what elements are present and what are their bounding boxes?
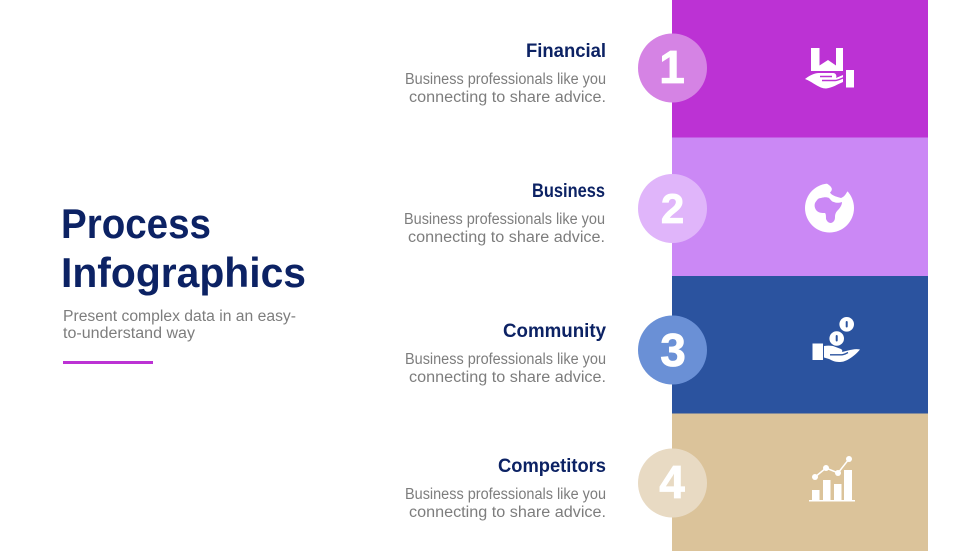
accent underline bbox=[63, 361, 153, 364]
panel: step 1 band bbox=[672, 0, 928, 138]
number badge 3 bbox=[638, 316, 707, 384]
step 1 text: Financial: connecting to share advice. bbox=[409, 89, 606, 106]
subtitle: to-understand way bbox=[63, 325, 195, 342]
icon: hand holding book bbox=[805, 48, 854, 88]
step 4 text: Competitors: Competitors bbox=[498, 456, 606, 477]
step 1 text: Financial: Financial bbox=[526, 41, 606, 62]
number badge 3: 3 bbox=[660, 324, 686, 376]
step 4 text: Competitors bbox=[405, 456, 606, 521]
subtitle: Present complex data in an easy- bbox=[63, 308, 296, 325]
panel: step 2 band bbox=[672, 138, 928, 276]
number badge 4: 4 bbox=[659, 456, 685, 508]
number badge 2 bbox=[638, 174, 707, 243]
number badge 4 bbox=[638, 448, 707, 518]
icon: globe bbox=[805, 176, 858, 232]
icon: hand receiving coins bbox=[812, 317, 860, 362]
step 3 text: Community bbox=[405, 321, 606, 386]
number badge 1 bbox=[638, 34, 707, 102]
title: Process bbox=[61, 200, 211, 247]
number badge 2: 2 bbox=[661, 185, 684, 232]
step 1 text: Financial: Business professionals like you bbox=[405, 71, 606, 88]
number badge 1: 1 bbox=[659, 41, 685, 93]
step 2 text: Business: Business bbox=[532, 181, 605, 202]
step 2 text: Business: Business professionals like you bbox=[404, 211, 605, 228]
step 2 text: Business: connecting to share advice. bbox=[408, 229, 605, 246]
step 2 text: Business bbox=[404, 181, 605, 246]
title bbox=[61, 200, 306, 296]
step 4 text: Competitors: connecting to share advice. bbox=[409, 504, 606, 521]
icon: bar chart with trend line bbox=[809, 456, 855, 502]
step 4 text: Competitors: Business professionals like you bbox=[405, 486, 606, 503]
panel: step 4 band bbox=[672, 414, 928, 551]
title: Infographics bbox=[61, 249, 306, 296]
step 3 text: Community: Business professionals like you bbox=[405, 351, 606, 368]
subtitle bbox=[63, 308, 296, 342]
step 3 text: Community: connecting to share advice. bbox=[409, 369, 606, 386]
step 3 text: Community: Community bbox=[503, 321, 606, 342]
panel: step 3 band bbox=[672, 276, 928, 414]
step 1 text: Financial bbox=[405, 41, 606, 106]
